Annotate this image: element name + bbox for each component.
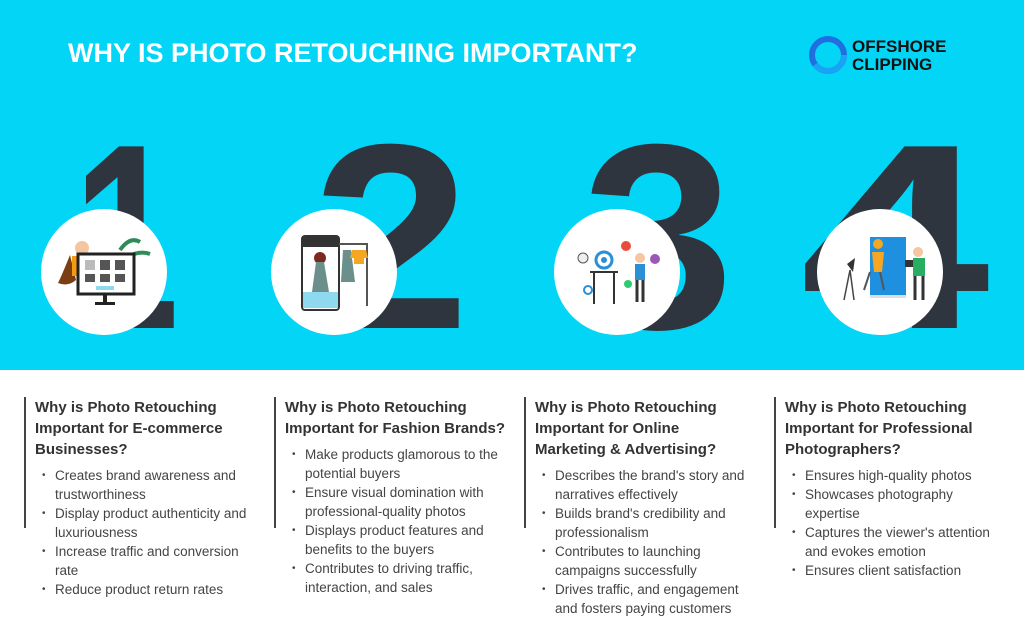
bullets 2: Displays product features and — [305, 523, 484, 538]
bullets 3 — [542, 468, 744, 616]
bullets 2 — [292, 447, 498, 595]
bullets 1: trustworthiness — [55, 487, 146, 502]
bullets 2: benefits to the buyers — [305, 542, 434, 557]
icon circle 2: fashion — [271, 209, 397, 335]
heading 4: Important for Professional — [785, 420, 973, 437]
bullets 4: Showcases photography — [805, 487, 953, 502]
icon circle 4: photographer — [817, 209, 943, 335]
bullets 3: campaigns successfully — [555, 563, 697, 578]
icon circle 3: marketing — [554, 209, 680, 335]
icon circle 1: ecommerce — [41, 209, 167, 335]
bullets 1: Creates brand awareness and — [55, 468, 236, 483]
bullets 1: Increase traffic and conversion — [55, 544, 239, 559]
heading 2 — [285, 399, 505, 437]
heading 3: Marketing & Advertising? — [535, 441, 716, 458]
heading 3 — [535, 399, 717, 458]
heading 4 — [785, 399, 973, 458]
bullets 4: Ensures high-quality photos — [805, 468, 972, 483]
heading 1: Businesses? — [35, 441, 128, 458]
heading 1: Important for E-commerce — [35, 420, 223, 437]
bullets 2: Contributes to driving traffic, — [305, 561, 473, 576]
bullets 3: Drives traffic, and engagement — [555, 582, 739, 597]
bullets 1: rate — [55, 563, 78, 578]
column 1 — [24, 397, 246, 597]
bullets 3: Builds brand's credibility and — [555, 506, 726, 521]
header band — [0, 0, 1024, 370]
bullets 2: professional-quality photos — [305, 504, 466, 519]
heading 2: Important for Fashion Brands? — [285, 420, 505, 437]
bullets 1: luxuriousness — [55, 525, 138, 540]
bullets 2: interaction, and sales — [305, 580, 433, 595]
bullets 3: professionalism — [555, 525, 649, 540]
bullets 1: Display product authenticity and — [55, 506, 246, 521]
heading 4: Why is Photo Retouching — [785, 399, 967, 416]
logo: CLIPPING — [852, 55, 932, 74]
bullets 2: potential buyers — [305, 466, 400, 481]
column 3 — [524, 397, 744, 616]
heading 3: Why is Photo Retouching — [535, 399, 717, 416]
bullets 3: Contributes to launching — [555, 544, 701, 559]
heading 3: Important for Online — [535, 420, 679, 437]
logo — [812, 37, 946, 74]
bullets 1 — [42, 468, 246, 597]
bullets 4: and evokes emotion — [805, 544, 926, 559]
bullets 3: Describes the brand's story and — [555, 468, 744, 483]
heading 2: Why is Photo Retouching — [285, 399, 467, 416]
title: WHY IS PHOTO RETOUCHING IMPORTANT? — [68, 38, 638, 68]
bullets 2: Make products glamorous to the — [305, 447, 498, 462]
big numbers — [73, 89, 992, 384]
bullets 4: Ensures client satisfaction — [805, 563, 961, 578]
heading 1: Why is Photo Retouching — [35, 399, 217, 416]
bullets 2: Ensure visual domination with — [305, 485, 484, 500]
heading 1 — [35, 399, 223, 458]
bullets 3: and fosters paying customers — [555, 601, 731, 616]
logo: OFFSHORE — [852, 37, 946, 56]
bullets 4: Captures the viewer's attention — [805, 525, 990, 540]
bullets 4: expertise — [805, 506, 860, 521]
bullets 3: narratives effectively — [555, 487, 678, 502]
bullets 1: Reduce product return rates — [55, 582, 223, 597]
column 4 — [774, 397, 990, 578]
column 2 — [274, 397, 505, 595]
bullets 4 — [792, 468, 990, 578]
heading 4: Photographers? — [785, 441, 901, 458]
